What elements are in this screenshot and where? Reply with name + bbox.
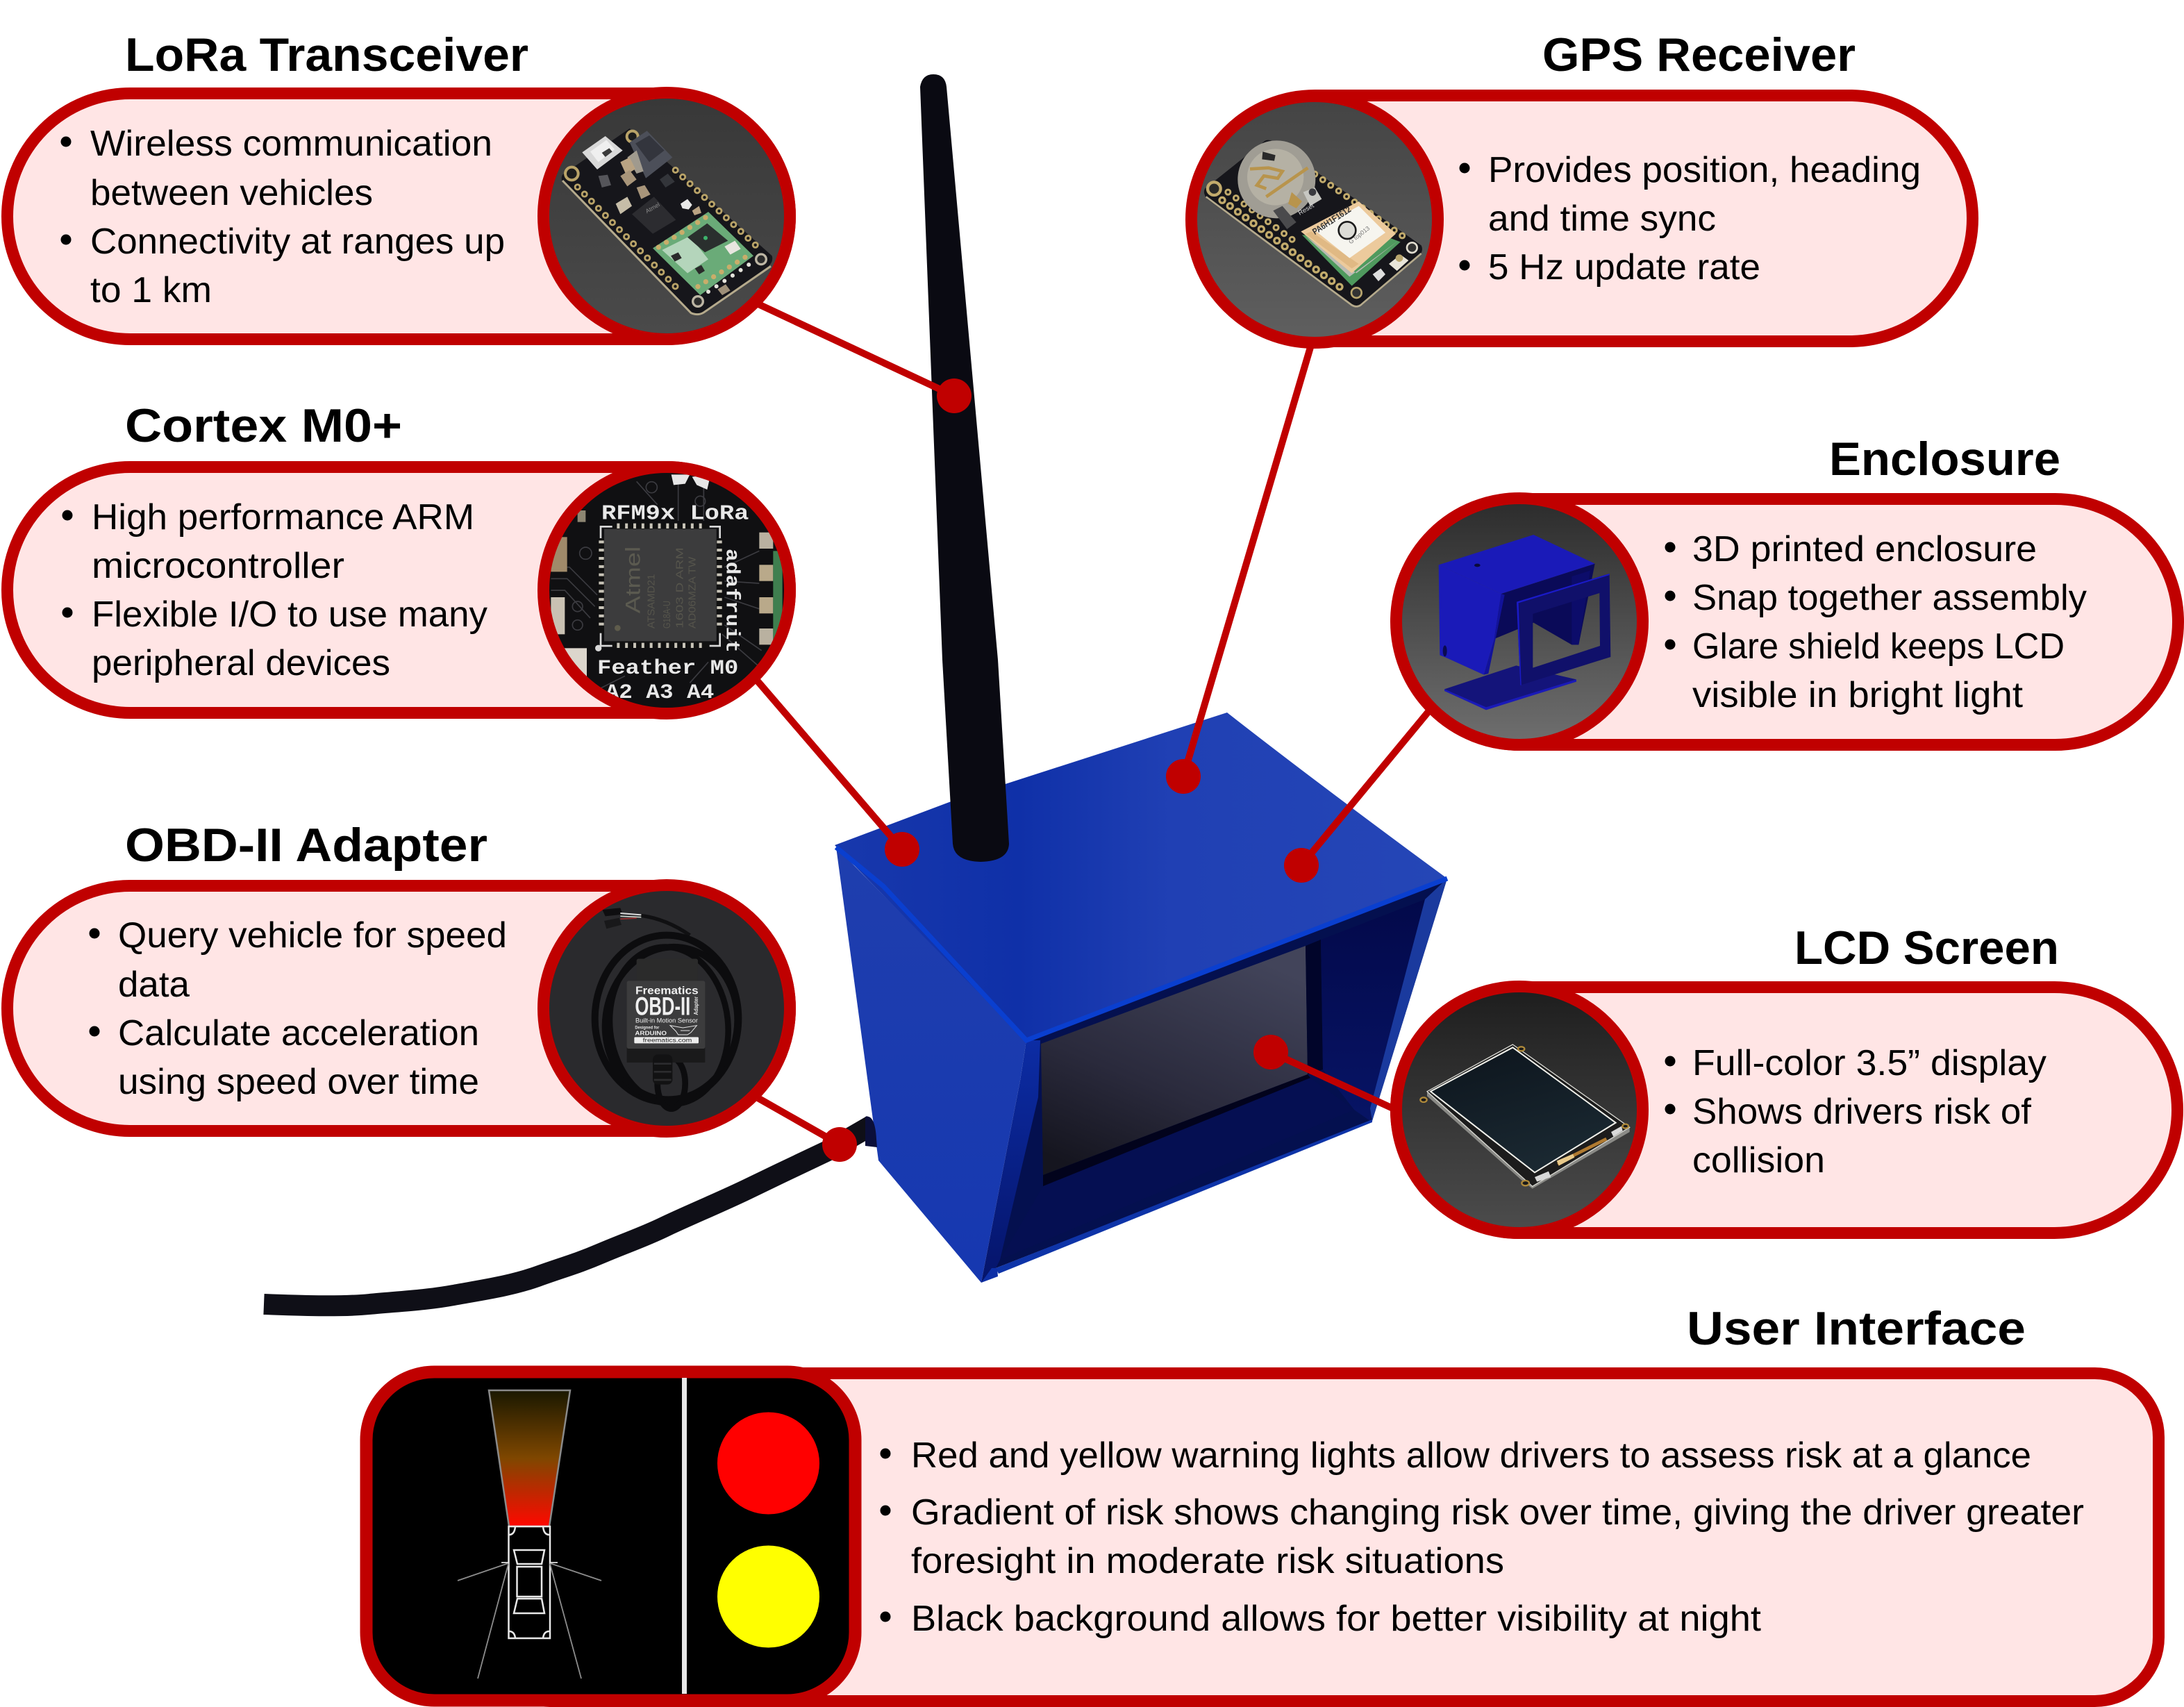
bullet list: Connectivity at ranges up (90, 222, 505, 262)
top face (835, 713, 1447, 1040)
leader line: Cortex M0+ (754, 677, 919, 867)
bullet list: Wireless communication (90, 124, 492, 164)
leader line: GPS Receiver (1166, 340, 1312, 794)
bullet list: Red and yellow warning lights allow drivers to assess risk at a glance (911, 1435, 2031, 1476)
photo: LoRa feather board: Atmel (644, 201, 661, 215)
foot (981, 1268, 998, 1283)
photo ring (1396, 986, 1643, 1233)
heading: OBD-II Adapter (125, 819, 487, 872)
antenna (920, 74, 1009, 862)
car outline (508, 1526, 550, 1638)
photo: OBD-II adapter: Designed for (635, 1026, 660, 1030)
panel: Enclosure (1396, 433, 2178, 744)
divider (682, 1378, 687, 1694)
cable (264, 1125, 872, 1306)
bullet list: Query vehicle for speed (118, 915, 507, 956)
bullet list: microcontroller (92, 546, 344, 586)
bullet list (881, 1435, 2084, 1639)
photo ring (1396, 499, 1643, 744)
photo: Cortex M0 chip closeup: AD06MZA TW (687, 556, 699, 628)
left wedge (981, 1040, 1040, 1283)
pill background (7, 467, 790, 713)
photo ring (543, 467, 790, 714)
photo: Cortex M0 chip closeup: 1603 D ARM (674, 547, 685, 628)
left face (836, 847, 1026, 1283)
bullet list: Provides position, heading (1488, 150, 1921, 190)
photo ring (543, 93, 790, 339)
panel: GPS Receiver (1192, 28, 1972, 343)
panel: User Interface (367, 1302, 2158, 1701)
photo: Cortex M0 chip closeup: ATSAMD21 (647, 574, 658, 628)
bullet list: collision (1692, 1140, 1825, 1181)
bullet list: visible in bright light (1692, 675, 2024, 715)
red warning light (717, 1413, 819, 1514)
black display panel (367, 1372, 856, 1700)
photo: Cortex M0 chip closeup: A2 A3 A4 (606, 681, 714, 704)
photo: GPS feather board (1194, 101, 1434, 340)
lower lip (1000, 1078, 1354, 1260)
cable port (865, 1117, 877, 1147)
screen shadow (1306, 940, 1323, 1074)
bullet list: between vehicles (90, 173, 373, 213)
pill background (7, 93, 790, 339)
risk gradient cone (489, 1390, 570, 1526)
side and rear view lines (458, 1563, 601, 1679)
photo: OBD-II adapter: OBD-II (635, 992, 690, 1021)
bright edges (836, 847, 1447, 1040)
photo: LCD display (1399, 990, 1639, 1229)
photo: Cortex M0 chip closeup: RFM9x LoRa (601, 501, 749, 526)
heading: GPS Receiver (1542, 28, 1856, 81)
pill background (1396, 988, 2178, 1233)
bullet list: Snap together assembly (1692, 578, 2087, 618)
photo ring (1192, 96, 1437, 343)
photo: GPS feather board: G top013 (1347, 224, 1371, 245)
bullet list (89, 915, 507, 1102)
pill background (486, 1374, 2158, 1701)
panel: LCD Screen (1396, 922, 2178, 1233)
leader line: OBD-II Adapter (754, 1096, 857, 1162)
bullet list (61, 124, 505, 310)
bullet list: to 1 km (90, 270, 212, 310)
bullet list (1665, 529, 2087, 715)
photo: LoRa feather board (549, 97, 785, 333)
leader line: LoRa Transceiver (757, 303, 972, 413)
bullet list (62, 497, 487, 683)
bullet list: Flexible I/O to use many (92, 594, 487, 635)
photo: OBD-II adapter: Adapter (693, 997, 699, 1015)
heading: LoRa Transceiver (125, 28, 528, 81)
leader line: Enclosure (1284, 705, 1434, 883)
leader line: LCD Screen (1253, 1035, 1396, 1110)
bullet list: 3D printed enclosure (1692, 529, 2037, 569)
photo: OBD-II adapter: ARDUINO (635, 1030, 667, 1036)
bottom rim (996, 1119, 1372, 1274)
photo: OBD-II adapter: freematics.com (643, 1037, 692, 1044)
photo: GPS feather board: Reset (1297, 202, 1315, 217)
bullet list: using speed over time (118, 1062, 479, 1102)
photo: Cortex M0 chip closeup: G18A-U (662, 601, 673, 628)
heading: Enclosure (1829, 433, 2060, 485)
photo: Cortex M0 chip closeup: Feather M0 (597, 657, 738, 680)
heading: User Interface (1687, 1302, 2026, 1355)
photo: OBD-II adapter: Built-in Motion Sensor (635, 1017, 698, 1024)
photo ring (543, 885, 790, 1132)
screen (1041, 946, 1308, 1175)
bullet list (1665, 1043, 2047, 1181)
pill background (1397, 499, 2178, 744)
panel: Cortex M0+ (7, 399, 790, 714)
bullet list: Calculate acceleration (118, 1013, 479, 1054)
bullet list: 5 Hz update rate (1488, 247, 1760, 288)
panel: LoRa Transceiver (7, 28, 790, 339)
heading: LCD Screen (1794, 922, 2059, 974)
yellow warning light (717, 1546, 819, 1647)
render: 3D printed enclosure (1399, 501, 1639, 741)
photo: Cortex M0 chip closeup: Atmel (622, 547, 645, 613)
photo: Cortex M0 chip closeup (549, 472, 785, 708)
risk gradient and car diagram (458, 1390, 601, 1679)
right interior wall (1321, 899, 1425, 1121)
photo: Cortex M0 chip closeup: adafruit (721, 549, 742, 653)
photo: OBD-II adapter (549, 890, 785, 1126)
bullet list: Glare shield keeps LCD (1692, 626, 2065, 667)
bullet list: Shows drivers risk of (1692, 1092, 2032, 1132)
photo: OBD-II adapter: Freematics (635, 985, 699, 997)
bullet list: foresight in moderate risk situations (911, 1541, 1504, 1581)
bullet list (1460, 150, 1921, 288)
bullet list: peripheral devices (92, 643, 390, 683)
pill background (7, 886, 790, 1131)
bullet list: and time sync (1488, 199, 1716, 239)
bullet list: Full-color 3.5” display (1692, 1043, 2047, 1083)
right rim (1370, 879, 1447, 1121)
bullet list: data (118, 965, 190, 1005)
bullet list: Gradient of risk shows changing risk over time, giving the driver greater (911, 1492, 2084, 1533)
heading: Cortex M0+ (125, 399, 402, 452)
photo: GPS feather board: PA6H1F1612 (1310, 205, 1353, 237)
panel: OBD-II Adapter (7, 819, 790, 1132)
bullet list: Black background allows for better visibility at night (911, 1599, 1762, 1639)
pill background (1192, 96, 1972, 342)
device enclosure photo (835, 713, 1447, 1283)
front opening interior (996, 879, 1447, 1268)
bullet list: High performance ARM (92, 497, 474, 538)
